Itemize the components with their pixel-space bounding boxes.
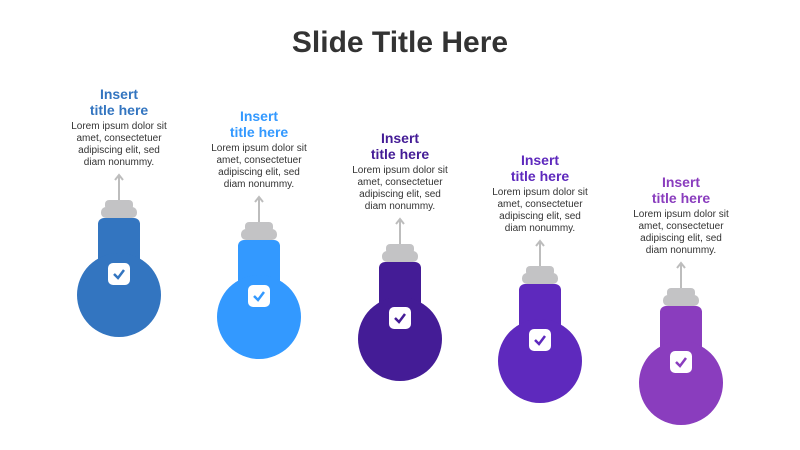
heading 5: title here xyxy=(652,190,710,206)
item 5 xyxy=(633,174,729,425)
text 2: Lorem ipsum dolor sit xyxy=(211,143,307,154)
heading 3: Insert xyxy=(381,130,419,146)
heading 2: title here xyxy=(230,124,288,140)
item 1 xyxy=(71,86,167,337)
text 2: adipiscing elit, sed xyxy=(218,167,300,178)
item 4 xyxy=(492,152,588,403)
text 3: amet, consectetuer xyxy=(357,177,443,188)
text 1: amet, consectetuer xyxy=(76,133,162,144)
bulb 5 xyxy=(639,263,723,425)
text 4: Lorem ipsum dolor sit xyxy=(492,187,588,198)
bulb 2 xyxy=(217,197,301,359)
text 5: diam nonummy. xyxy=(646,245,716,256)
text 1: diam nonummy. xyxy=(84,157,154,168)
text 4: amet, consectetuer xyxy=(497,199,583,210)
text 4: adipiscing elit, sed xyxy=(499,211,581,222)
text 5: Lorem ipsum dolor sit xyxy=(633,209,729,220)
item 3 xyxy=(352,130,448,381)
heading 4: Insert xyxy=(521,152,559,168)
text 2: amet, consectetuer xyxy=(216,155,302,166)
text 3: diam nonummy. xyxy=(365,201,435,212)
text 5: amet, consectetuer xyxy=(638,221,724,232)
bulb 4 xyxy=(498,241,582,403)
heading 1: title here xyxy=(90,102,148,118)
text 2: diam nonummy. xyxy=(224,179,294,190)
title: Slide Title Here xyxy=(292,26,508,59)
text 4: diam nonummy. xyxy=(505,223,575,234)
text 3: adipiscing elit, sed xyxy=(359,189,441,200)
heading 1: Insert xyxy=(100,86,138,102)
heading 5: Insert xyxy=(662,174,700,190)
heading 3: title here xyxy=(371,146,429,162)
text 1: adipiscing elit, sed xyxy=(78,145,160,156)
text 3: Lorem ipsum dolor sit xyxy=(352,165,448,176)
text 1: Lorem ipsum dolor sit xyxy=(71,121,167,132)
bulb 3 xyxy=(358,219,442,381)
heading 2: Insert xyxy=(240,108,278,124)
text 5: adipiscing elit, sed xyxy=(640,233,722,244)
item 2 xyxy=(211,108,307,359)
bulb 1 xyxy=(77,175,161,337)
heading 4: title here xyxy=(511,168,569,184)
